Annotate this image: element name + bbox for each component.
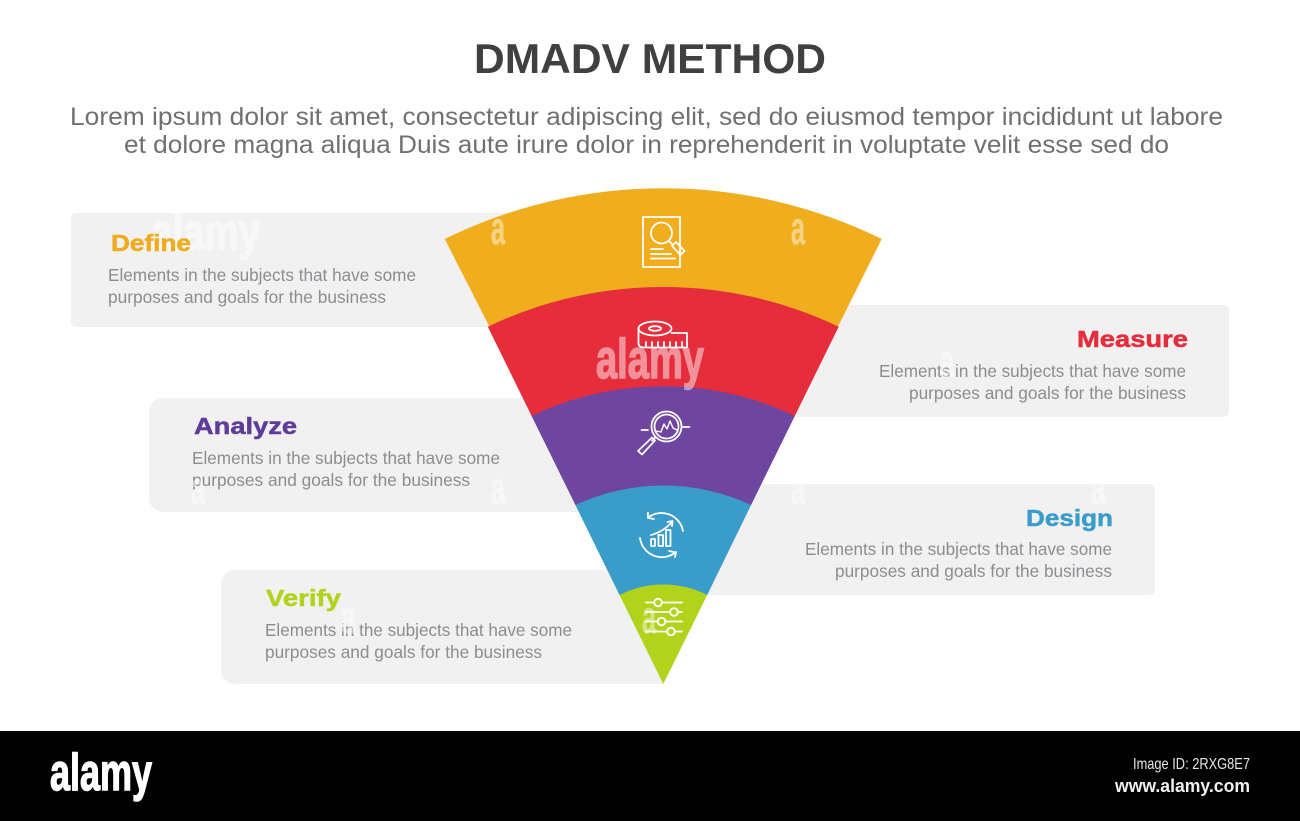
description: analyze: Elements in the subjects that have some bbox=[192, 448, 500, 468]
description: measure: purposes and goals for the business bbox=[909, 383, 1186, 403]
website: www.alamy.com bbox=[1114, 776, 1250, 796]
funnel chart bbox=[445, 188, 882, 684]
heading: verify: Verify bbox=[266, 585, 341, 611]
panel: verify bbox=[221, 570, 663, 684]
watermark: define panel: alamy bbox=[151, 204, 260, 260]
description: verify: purposes and goals for the business bbox=[265, 642, 542, 662]
watermark: repeated marks: a bbox=[191, 462, 205, 514]
watermark: repeated marks bbox=[191, 202, 1105, 643]
watermark: repeated marks: a bbox=[491, 202, 505, 254]
watermark: repeated marks: a bbox=[940, 335, 954, 387]
panel: design bbox=[690, 484, 1155, 595]
watermark: repeated marks: a bbox=[1091, 462, 1105, 514]
title: DMADV METHOD bbox=[474, 35, 826, 82]
description: design: Elements in the subjects that have some bbox=[805, 539, 1112, 559]
segment: define bbox=[445, 188, 882, 327]
watermark: repeated marks: a bbox=[791, 202, 805, 254]
description: design bbox=[805, 539, 1112, 581]
heading: analyze: Analyze bbox=[194, 413, 297, 439]
footer logo: alamy bbox=[50, 744, 152, 802]
icon: document with magnifier bbox=[643, 217, 684, 267]
watermark: repeated marks: a bbox=[791, 462, 805, 514]
description: analyze: purposes and goals for the business bbox=[192, 470, 470, 490]
subtitle text block bbox=[70, 103, 1223, 159]
segment: design bbox=[575, 486, 751, 595]
description: define: Elements in the subjects that have some bbox=[108, 265, 416, 285]
heading: measure: Measure bbox=[1077, 326, 1188, 352]
description: define: purposes and goals for the business bbox=[108, 287, 386, 307]
segment: measure bbox=[488, 287, 839, 416]
segment: analyze bbox=[532, 386, 795, 505]
description: verify: Elements in the subjects that have some bbox=[265, 620, 572, 640]
panel: measure bbox=[780, 305, 1229, 417]
icon: magnifier with chart bbox=[638, 412, 690, 454]
segment: verify bbox=[620, 585, 707, 684]
description: measure: Elements in the subjects that have some bbox=[879, 361, 1186, 381]
description: verify bbox=[265, 620, 572, 662]
subtitle text block: Lorem ipsum dolor sit amet, consectetur adipiscing elit, sed do eiusmod tempor incididunt ut labore bbox=[70, 103, 1223, 131]
subtitle text block: et dolore magna aliqua Duis aute irure dolor in reprehenderit in voluptate velit esse sed do bbox=[124, 131, 1169, 159]
icon: measuring tape bbox=[638, 322, 687, 348]
icon: sliders bbox=[646, 599, 682, 635]
description: analyze bbox=[192, 448, 500, 490]
footer bar bbox=[0, 731, 1300, 821]
image id: Image ID: 2RXG8E7 bbox=[1133, 756, 1250, 773]
icon: growth cycle chart bbox=[640, 512, 683, 557]
description: define bbox=[108, 265, 416, 307]
watermark: repeated marks: a bbox=[642, 591, 656, 643]
panel: define bbox=[71, 204, 511, 327]
watermark: center alamy: alamy bbox=[596, 327, 704, 390]
watermark: repeated marks: a bbox=[341, 591, 355, 643]
watermark: repeated marks: a bbox=[491, 462, 505, 514]
heading: define: Define bbox=[111, 230, 191, 256]
description: design: purposes and goals for the business bbox=[835, 561, 1112, 581]
heading: design: Design bbox=[1026, 505, 1113, 531]
panel: analyze bbox=[149, 398, 589, 512]
description: measure bbox=[879, 361, 1186, 403]
